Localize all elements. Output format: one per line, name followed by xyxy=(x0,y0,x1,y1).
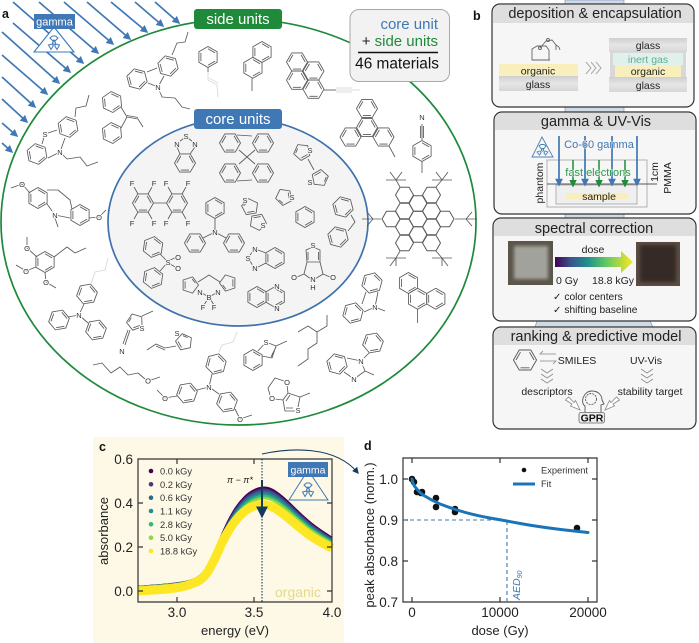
side unit molecule: butyl carbazole propenyl: N xyxy=(155,83,161,92)
side unit molecule: methyl triphenylene xyxy=(337,95,397,157)
y tick labels: 0.2 xyxy=(114,540,133,555)
side unit molecule: methyl cyanothiophene: N xyxy=(119,347,125,356)
core unit molecule: octafluorobiphenyl: F xyxy=(164,219,169,228)
side unit molecule: methyl carbazole xyxy=(341,271,385,325)
core unit molecule: thienopyrrole dione xyxy=(291,241,336,292)
legend xyxy=(149,466,198,556)
side unit molecule: methyl EDOT: O xyxy=(284,378,290,387)
core unit molecule: benzene xyxy=(296,206,314,228)
y tick labels: 0.0 xyxy=(114,584,133,599)
sample xyxy=(566,191,628,203)
side unit molecule: ethylidene fluorene xyxy=(102,91,143,144)
legend box: core unit + side units: core unit xyxy=(380,16,439,33)
x tick labels: 3.0 xyxy=(168,605,186,620)
y tick labels: 0.4 xyxy=(114,496,133,511)
core unit molecule: benzothiadiazole top: S xyxy=(183,132,189,141)
icon: head with brain xyxy=(583,391,604,412)
core unit molecule: thienothiophene: S xyxy=(242,196,248,205)
heading: gamma: gamma & UV-Vis xyxy=(541,114,651,130)
UV-Vis label: UV-Vis xyxy=(630,355,662,367)
x tick labels xyxy=(168,605,341,620)
core unit molecule: benzothiadiazole lower: N xyxy=(252,264,258,273)
sample: sample xyxy=(582,191,616,203)
x tick labels: 20000 xyxy=(569,605,607,620)
core unit molecule: dibenzothiophene sulfone: O xyxy=(175,253,181,262)
y axis title: peak absorbance (norm.) xyxy=(362,462,377,608)
dose labels xyxy=(556,244,635,287)
y tick labels xyxy=(379,472,398,610)
side unit molecule: methyl benzonitrile: N xyxy=(419,113,425,122)
side unit molecule: ethynyl pyrene xyxy=(284,48,360,103)
labels: fast electrons xyxy=(565,167,631,179)
core unit molecule: thienopyrrole dione: O xyxy=(291,273,297,282)
benzene with SMILES: SMILES xyxy=(558,355,596,367)
core unit molecule: BODIPY: F xyxy=(212,303,217,312)
legend: Fit xyxy=(541,479,552,489)
side unit molecule: butyl carbazole propenyl xyxy=(125,32,190,109)
peak decrease arrow xyxy=(261,480,263,516)
core unit molecule: benzothiadiazole top xyxy=(172,132,198,177)
y tick labels: 1.0 xyxy=(379,472,398,487)
side unit molecule: trimethoxy propenyl benzene xyxy=(16,237,86,288)
side units label xyxy=(194,9,282,29)
side units label: side units xyxy=(206,11,270,28)
dose labels: 18.8 kGy xyxy=(592,275,635,287)
core units label: core units xyxy=(205,111,271,128)
core unit molecule: triphenylamine: N xyxy=(212,228,218,237)
legend: 18.8 kGy xyxy=(160,546,198,556)
encapsulated stack xyxy=(609,38,687,92)
side unit molecule: phenyl methyl benzimidazole: N xyxy=(351,375,357,384)
core unit molecule: octafluorobiphenyl: F xyxy=(130,179,135,188)
core unit molecule: octafluorobiphenyl: F xyxy=(186,219,191,228)
core unit molecule: BODIPY xyxy=(183,275,235,312)
core unit molecule: octafluorobiphenyl: F xyxy=(186,179,191,188)
icon: radiation triangle xyxy=(532,137,553,157)
core unit molecule: bithiophene: S xyxy=(307,178,313,187)
side unit molecule: butyl phenothiazine propenyl: N xyxy=(57,148,63,157)
side unit molecule: methyl EDOT: O xyxy=(269,394,275,403)
y tick labels: 0.7 xyxy=(379,595,398,610)
legend box: core unit + side units: 46 materials xyxy=(355,56,439,72)
core unit molecule: dibenzothiophene sulfone xyxy=(143,235,181,290)
legend: 0.6 kGy xyxy=(160,493,192,503)
phantom setup xyxy=(547,160,657,207)
core unit molecule: BODIPY: N xyxy=(215,288,221,297)
photo: before xyxy=(508,241,553,285)
dotted peak line xyxy=(261,459,263,602)
dashed guides xyxy=(403,520,507,602)
core unit molecule: octafluorobiphenyl: F xyxy=(130,219,135,228)
gamma ray arrows xyxy=(2,2,179,152)
side unit molecule: hexabenzocoronene with tert-butyl groups xyxy=(362,172,477,266)
gamma badge xyxy=(34,14,75,52)
side unit molecule: methyl benzo phenanthrene xyxy=(399,272,445,323)
gamma arrows xyxy=(559,136,637,185)
outer ellipse: side units xyxy=(1,19,476,425)
descriptors and target labels: descriptors xyxy=(521,386,573,398)
panel c label: c xyxy=(99,440,106,454)
core unit molecule: quinoxaline: N xyxy=(274,304,280,313)
side unit molecule: methyl EDOT xyxy=(268,378,310,415)
y tick labels xyxy=(114,452,133,599)
core unit molecule: octafluorobiphenyl xyxy=(130,179,191,228)
AED90 label: AED xyxy=(511,578,523,600)
checklist: ✓ shifting baseline xyxy=(553,305,638,316)
AED90 label: 90 xyxy=(517,571,524,578)
chevrons xyxy=(586,62,601,74)
heading: deposition: deposition & encapsulation xyxy=(508,6,682,22)
organic on glass stack: organic xyxy=(521,66,555,78)
core unit molecule: bithiophene: S xyxy=(307,146,313,155)
panel d: dose response chart xyxy=(362,458,607,638)
organic watermark: organic xyxy=(275,584,321,600)
core unit molecule: benzothiadiazole top: N xyxy=(192,140,198,149)
side unit molecule: trimethoxy propenyl benzene: O xyxy=(23,267,29,276)
panel b: gamma and UV-Vis xyxy=(494,112,696,214)
side unit molecule: methoxy hexane chain: O xyxy=(145,376,151,386)
checklist: ✓ color centers xyxy=(553,292,623,303)
fit curve xyxy=(412,479,588,532)
core unit molecule: fluorene xyxy=(326,195,355,249)
encapsulated stack: inert gas xyxy=(628,54,668,66)
side unit molecule: dimethoxy triphenylamine: N xyxy=(206,383,212,392)
icon: robot arm xyxy=(532,38,560,60)
GPR box: GPR xyxy=(581,412,604,424)
core unit molecule: benzothiadiazole top: N xyxy=(174,140,180,149)
side unit molecule: methyl cyanothiophene: S xyxy=(139,324,145,333)
benzene with SMILES xyxy=(511,345,596,375)
core unit molecule: thienopyrrole dione: H xyxy=(310,283,316,292)
side unit molecule: methyl EDOT: S xyxy=(295,406,301,415)
core unit molecule: thienopyrrole dione: O xyxy=(330,273,336,282)
gamma badge in chart: gamma xyxy=(290,464,326,476)
descriptors and target labels xyxy=(521,386,682,398)
labels: Co-60 gamma xyxy=(564,139,635,151)
side unit molecule: methyl cyanothiophene xyxy=(119,311,153,356)
core unit molecule: octafluorobiphenyl: F xyxy=(152,179,157,188)
core unit molecule: BODIPY: F xyxy=(201,303,206,312)
core units label xyxy=(194,109,282,129)
core unit molecule: thienothiophene xyxy=(241,196,267,232)
connectors between workflow boxes xyxy=(535,0,653,327)
labels: PMMA xyxy=(662,162,674,194)
panel d label: d xyxy=(364,439,372,453)
pi-pi* label: π − π* xyxy=(227,475,253,485)
inner ellipse: core units xyxy=(108,118,368,326)
encapsulated stack: organic xyxy=(631,66,665,78)
x tick labels xyxy=(408,605,607,620)
checklist xyxy=(553,292,638,316)
legend: 1.1 kGy xyxy=(160,506,192,516)
panel b label: b xyxy=(473,9,481,23)
experiment points xyxy=(409,476,580,531)
side unit molecule: thienyl propene xyxy=(147,329,195,352)
core unit molecule: thiophene: S xyxy=(289,193,295,202)
y axis title: absorbance xyxy=(96,497,111,565)
hollow arrows to GPR xyxy=(566,397,620,410)
frame and ticks xyxy=(403,458,597,602)
descriptors and target labels: stability target xyxy=(618,386,682,398)
labels xyxy=(534,139,674,203)
side unit molecule: trimethoxy propenyl benzene: O xyxy=(24,244,30,253)
side unit molecule: methoxy dibenzazepine: O xyxy=(96,213,102,222)
legend: 0.2 kGy xyxy=(160,480,192,490)
side unit molecule: methoxy dibenzazepine xyxy=(11,180,106,227)
core unit molecule: thienothiophene: S xyxy=(260,221,266,230)
encapsulated stack: glass xyxy=(636,40,660,52)
side unit molecule: phenyl methyl benzimidazole xyxy=(325,330,385,384)
core unit molecule: BODIPY: N xyxy=(197,288,203,297)
core unit molecule: benzothiadiazole lower xyxy=(245,245,284,273)
labels: phantom xyxy=(534,162,546,203)
side unit molecule: dimethoxy triphenylamine xyxy=(157,332,252,424)
core unit molecule: quinoxaline xyxy=(248,282,284,313)
side unit molecule: methoxy dibenzazepine: N xyxy=(52,211,58,220)
curved arrow from c to d xyxy=(262,450,358,473)
fast electron arrows xyxy=(573,160,625,186)
panel c background xyxy=(93,437,344,643)
panel b: ranking and predictive model xyxy=(493,327,696,429)
side unit molecule: methoxy hexane chain xyxy=(93,363,160,386)
x axis title: dose (Gy) xyxy=(471,623,529,638)
heading: spectral: spectral correction xyxy=(535,221,653,237)
legend: 5.0 kGy xyxy=(160,533,192,543)
x tick labels: 0 xyxy=(408,605,416,620)
panel b: deposition and encapsulation xyxy=(492,4,694,107)
encapsulated stack: glass xyxy=(636,80,660,92)
side unit molecule: trimethoxy propenyl benzene: O xyxy=(43,278,49,287)
dose labels: dose xyxy=(582,244,605,256)
panel b: spectral correction xyxy=(493,218,696,321)
dose labels: 0 Gy xyxy=(556,275,579,287)
side unit molecule: butyl phenothiazine propenyl xyxy=(26,95,98,166)
side unit molecule: phenyl methyl benzimidazole: N xyxy=(358,357,364,366)
chevrons down xyxy=(541,369,653,383)
side unit molecule: dimethoxy triphenylamine: O xyxy=(237,415,243,424)
core unit molecule: spirobifluorene xyxy=(217,129,276,187)
core unit molecule: bithiophene xyxy=(291,141,331,189)
spectra curves xyxy=(138,488,332,591)
side unit molecule: butyl phenothiazine propenyl: S xyxy=(42,130,48,139)
core unit molecule: BODIPY: B xyxy=(206,293,212,302)
legend box: core unit + side units xyxy=(350,10,450,82)
x tick labels: 10000 xyxy=(481,605,519,620)
side unit molecule: thienyl propene: S xyxy=(174,329,180,338)
core unit molecule: benzothiadiazole lower: N xyxy=(252,245,258,254)
side unit molecule: triphenylamine styryl faded xyxy=(47,258,108,343)
side unit molecule: triphenylamine styryl faded: N xyxy=(76,311,82,320)
gamma badge in chart xyxy=(288,462,328,500)
core unit molecule: octafluorobiphenyl: F xyxy=(164,179,169,188)
panel c: absorbance chart xyxy=(96,452,341,638)
heading: ranking: ranking & predictive model xyxy=(511,329,681,345)
x tick labels: 3.5 xyxy=(245,605,263,620)
photo: after xyxy=(636,242,680,286)
x axis title: energy (eV) xyxy=(201,623,269,638)
core unit molecule: dibenzothiophene sulfone: S xyxy=(165,258,171,267)
core unit molecule: thienopyrrole dione: S xyxy=(310,241,316,250)
side unit molecule: methoxy dibenzazepine: O xyxy=(19,180,25,189)
legend: Experiment xyxy=(541,466,588,476)
core unit molecule: benzothiadiazole lower: S xyxy=(245,254,251,263)
core unit molecule: octafluorobiphenyl: F xyxy=(152,219,157,228)
side unit molecule: methyl naphthalene xyxy=(244,42,271,91)
core unit molecule: triphenylamine xyxy=(182,198,247,257)
legend: 0.0 kGy xyxy=(160,466,192,476)
y tick labels: 0.8 xyxy=(379,554,398,569)
panel a label: a xyxy=(2,7,10,21)
legend: 2.8 kGy xyxy=(160,520,192,530)
side unit molecule: methyl benzothiophene xyxy=(244,338,287,370)
core unit molecule: dibenzothiophene sulfone: O xyxy=(175,264,181,273)
side unit molecule: methyl heptane xyxy=(298,315,327,366)
side unit molecule: methyl benzonitrile xyxy=(413,113,431,173)
y tick labels: 0.6 xyxy=(114,452,133,467)
x tick labels: 4.0 xyxy=(323,605,341,620)
side unit molecule: faded styryl benzene xyxy=(199,46,218,97)
organic on glass stack xyxy=(499,64,578,91)
organic on glass stack: glass xyxy=(526,79,550,91)
core unit molecule: quinoxaline: N xyxy=(274,282,280,291)
labels: 1cm xyxy=(649,162,661,182)
gamma badge: gamma xyxy=(36,16,74,28)
dose gradient arrow xyxy=(555,251,633,273)
frame and ticks xyxy=(138,459,332,602)
core unit molecule: thiophene xyxy=(274,188,295,206)
core unit molecule: thienopyrrole dione: N xyxy=(310,275,316,284)
side unit molecule: dimethoxy triphenylamine: O xyxy=(162,394,168,403)
legend box: core unit + side units: + side units xyxy=(362,33,438,50)
side unit molecule: methyl benzothiophene: S xyxy=(263,338,269,347)
side unit molecule: methyl carbazole: N xyxy=(372,303,378,312)
y tick labels: 0.9 xyxy=(379,513,398,528)
legend xyxy=(513,466,588,489)
